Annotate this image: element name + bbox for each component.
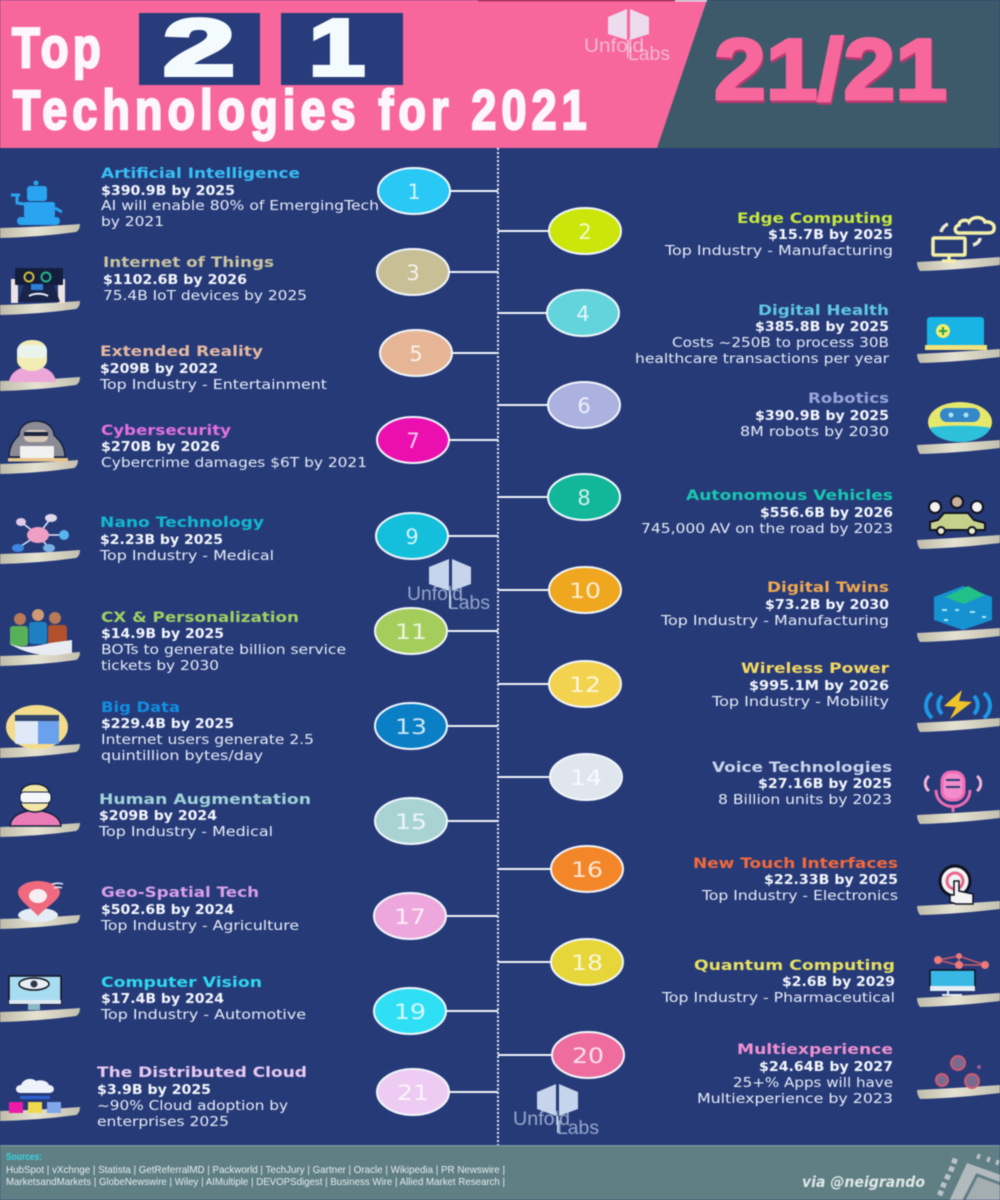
pedestal (0, 460, 78, 474)
badge 7 (377, 417, 449, 463)
description: 8M robots by 2030 (740, 425, 889, 440)
badge 9 (376, 513, 448, 559)
number box 2 (139, 3, 260, 92)
pedestal (0, 550, 80, 564)
pedestal (917, 1085, 1000, 1099)
description: by 2021 (101, 215, 164, 230)
title word Top: Top (12, 15, 101, 79)
connector (498, 868, 551, 870)
badge 20: 20 (572, 1044, 604, 1068)
pedestal (0, 652, 80, 666)
badge 17: 17 (394, 905, 426, 929)
badge 12: 12 (569, 673, 601, 697)
connector (447, 820, 498, 822)
heading: The Distributed Cloud (97, 1065, 307, 1081)
icon: person in XR visor (9, 340, 56, 382)
connector (498, 683, 549, 685)
heading: Multiexperience (737, 1042, 893, 1058)
badge 1: 1 (407, 180, 421, 204)
logo: Unfold Labs header: Labs (628, 44, 670, 65)
heading: Computer Vision (101, 975, 262, 991)
pedestal (917, 440, 1000, 454)
item 11: CX & Personalization (0, 608, 498, 674)
heading: Edge Computing (737, 211, 893, 227)
heading: Nano Technology (100, 515, 265, 531)
item 6: Robotics (498, 382, 1000, 454)
icon: quantum computer (930, 953, 989, 995)
sources list: HubSpot | vXchnge | Statista | GetReferralMD | Packworld | TechJury | Gartner | Oracle | Wikipedia | PR Newswire | (6, 1164, 505, 1176)
value: $390.9B by 2025 (755, 409, 889, 424)
heading: Robotics (808, 391, 889, 407)
heading: Big Data (101, 700, 180, 716)
item 12: Wireless Power (498, 661, 1000, 732)
value: $209B by 2022 (100, 362, 218, 377)
progress label 21/21: 21/21 (714, 22, 947, 118)
connector (450, 190, 498, 192)
heading: Autonomous Vehicles (686, 488, 893, 504)
icon: hacker at laptop (8, 421, 68, 462)
item 19: Computer Vision (0, 975, 498, 1034)
title line Technologies for 2021: Technologies for 2021 (13, 78, 587, 141)
item 15: Human Augmentation (0, 784, 498, 844)
value: $270B by 2026 (101, 440, 220, 455)
badge 5 (380, 330, 452, 376)
connector (446, 1010, 498, 1012)
pedestal (0, 744, 80, 758)
watermark logo: bottom (513, 1084, 599, 1139)
connector (447, 630, 498, 632)
footer band (0, 1145, 1000, 1200)
pedestal (917, 628, 1000, 642)
pedestal (0, 377, 80, 391)
connector (449, 1091, 498, 1093)
badge 21: 21 (397, 1081, 429, 1105)
watermark logo: center: Labs (448, 593, 490, 614)
top edge strip (478, 0, 707, 2)
description: Top Industry - Electronics (701, 889, 898, 904)
icon: data window (6, 705, 68, 749)
description (101, 199, 379, 230)
item 2: Edge Computing (498, 208, 1000, 271)
description: 8 Billion units by 2023 (718, 793, 892, 808)
description: healthcare transactions per year (635, 352, 890, 367)
icon: cloud with nodes (9, 1079, 61, 1113)
badge 4: 4 (576, 302, 590, 326)
description: 75.4B IoT devices by 2025 (103, 289, 307, 304)
connector (498, 589, 549, 591)
item 8: Autonomous Vehicles (498, 474, 1000, 549)
value: $995.1M by 2026 (749, 679, 889, 694)
value: $1102.6B by 2026 (103, 273, 247, 288)
item 7: Cybersecurity (0, 417, 498, 474)
description (101, 643, 346, 674)
heading: CX & Personalization (101, 610, 299, 626)
value: $390.9B by 2025 (101, 184, 235, 199)
item 4: Digital Health (498, 290, 1000, 367)
badge 2 (549, 208, 621, 254)
badge 4 (547, 290, 619, 336)
badge 17 (374, 893, 446, 939)
pedestal (0, 915, 80, 929)
badge 8: 8 (577, 486, 591, 510)
pedestal (917, 810, 1000, 824)
badge 13 (375, 703, 447, 749)
description: BOTs to generate billion service (101, 643, 346, 658)
icon: three customers (8, 609, 72, 655)
connector (449, 439, 498, 441)
connector (452, 352, 498, 354)
badge 1 (378, 168, 450, 214)
pedestal (0, 1107, 80, 1121)
pedestal (917, 349, 1000, 363)
pedestal (917, 993, 1000, 1007)
badge 2: 2 (578, 220, 592, 244)
icon: chip (938, 1156, 1000, 1200)
connector (446, 915, 498, 917)
badge 6: 6 (577, 394, 591, 418)
heading: Voice Technologies (712, 760, 892, 776)
item 9: Nano Technology (0, 513, 498, 564)
badge 12 (549, 661, 621, 707)
description: 745,000 AV on the road by 2023 (641, 522, 893, 537)
progress label 21/21: 21/21 (715, 24, 948, 120)
connector (448, 535, 498, 537)
heading: Wireless Power (741, 661, 890, 677)
badge 7: 7 (406, 429, 420, 453)
description: ~90% Cloud adoption by (97, 1099, 288, 1114)
connector (498, 961, 551, 963)
description: Multiexperience by 2023 (697, 1092, 893, 1107)
description: Cybercrime damages $6T by 2021 (101, 456, 367, 471)
heading: Digital Twins (767, 580, 889, 596)
number box 1: 1 (309, 3, 365, 92)
description: Top Industry - Automotive (100, 1008, 306, 1023)
item 16: New Touch Interfaces (498, 846, 1000, 915)
badge 3 (377, 249, 449, 295)
description: quintillion bytes/day (101, 749, 263, 764)
value: $502.6B by 2024 (101, 903, 234, 918)
icon: augmented person (10, 784, 61, 826)
badge 14: 14 (570, 766, 602, 790)
pedestal (0, 1008, 80, 1022)
item 13: Big Data (0, 700, 498, 764)
heading: Artificial Intelligence (101, 166, 300, 182)
item 21: The Distributed Cloud (0, 1065, 498, 1130)
timeline dotted spine (497, 148, 499, 1145)
item 5: Extended Reality (0, 330, 498, 393)
badge 3: 3 (406, 261, 420, 285)
badge 9: 9 (405, 525, 419, 549)
badge 18: 18 (571, 951, 603, 975)
description: Top Industry - Pharmaceutical (661, 991, 895, 1006)
watermark logo: bottom: Labs (557, 1118, 599, 1139)
badge 11 (375, 608, 447, 654)
value: $27.16B by 2025 (758, 777, 892, 792)
heading: Cybersecurity (101, 423, 232, 439)
icon: location pin (18, 881, 63, 922)
value: $385.8B by 2025 (755, 320, 889, 335)
heading: Internet of Things (103, 255, 274, 271)
connector (498, 1054, 552, 1056)
connector (498, 404, 548, 406)
heading: Geo-Spatial Tech (101, 885, 259, 901)
icon: microphone (925, 772, 981, 812)
badge 18 (551, 939, 623, 985)
icon: cloud and monitor (933, 218, 994, 261)
value: $556.6B by 2026 (760, 506, 893, 521)
description (635, 336, 890, 367)
item 17: Geo-Spatial Tech (0, 881, 498, 939)
heading: Extended Reality (100, 344, 264, 360)
connector (498, 230, 549, 232)
value: $22.33B by 2025 (764, 873, 898, 888)
header banner (0, 0, 1000, 148)
pedestal (917, 901, 1000, 915)
description: enterprises 2025 (97, 1115, 229, 1130)
icon: connected car (929, 496, 985, 535)
item 20: Multiexperience (498, 1032, 1000, 1107)
description: Top Industry - Manufacturing (660, 614, 889, 629)
watermark logo: center (407, 559, 490, 614)
heading: New Touch Interfaces (693, 856, 898, 872)
sources heading: Sources: (6, 1151, 42, 1163)
badge 6 (548, 382, 620, 428)
number box 2: 2 (163, 3, 235, 92)
badge 10 (549, 567, 621, 613)
credit: via @neigrando (802, 1173, 925, 1191)
number box 1 (281, 3, 403, 92)
sources list: MarketsandMarkets | GlobeNewswire | Wiley | AIMultiple | DEVOPSdigest | Business Wire | Allied Market Research | (6, 1176, 505, 1188)
value: $2.23B by 2025 (100, 533, 223, 548)
badge 20 (552, 1032, 624, 1078)
badge 13: 13 (395, 715, 427, 739)
badge 15: 15 (395, 810, 427, 834)
badge 16: 16 (571, 858, 603, 882)
badge 15 (375, 798, 447, 844)
heading: Human Augmentation (99, 792, 311, 808)
badge 11: 11 (395, 620, 427, 644)
value: $15.7B by 2025 (768, 228, 893, 243)
sources list (6, 1164, 505, 1188)
icon: wireless bolt (926, 690, 990, 719)
value: $2.6B by 2029 (782, 975, 895, 990)
description: AI will enable 80% of EmergingTech (101, 199, 379, 214)
badge 8 (548, 474, 620, 520)
icon: robot (11, 180, 62, 225)
badge 16 (551, 846, 623, 892)
description: Top Industry - Agriculture (100, 919, 299, 934)
heading: Quantum Computing (694, 958, 895, 974)
description (97, 1099, 288, 1130)
description (101, 733, 314, 764)
description: Top Industry - Manufacturing (664, 244, 893, 259)
connector (449, 271, 498, 273)
connector (498, 776, 550, 778)
value: $24.64B by 2027 (759, 1060, 893, 1075)
pedestal (917, 535, 1000, 549)
description: 25+% Apps will have (733, 1076, 893, 1091)
badge 19: 19 (394, 1000, 426, 1024)
connector (498, 496, 548, 498)
icon: robot head (928, 402, 992, 442)
pedestal (0, 301, 80, 315)
icon: IoT tablet and hands (11, 268, 65, 303)
value: $14.9B by 2025 (101, 627, 224, 642)
value: $17.4B by 2024 (101, 992, 224, 1007)
item 18: Quantum Computing (498, 939, 1000, 1007)
description: Internet users generate 2.5 (101, 733, 314, 748)
value: $209B by 2024 (99, 809, 217, 824)
badge 14 (550, 754, 622, 800)
icon: nano network (12, 514, 69, 552)
icon: touch target (940, 866, 973, 904)
value: $229.4B by 2025 (101, 717, 234, 732)
watermark logo: center: Unfold (407, 584, 463, 605)
description: Top Industry - Medical (98, 825, 273, 840)
heading: Digital Health (758, 303, 889, 319)
badge 19 (374, 988, 446, 1034)
header pink panel (0, 0, 707, 148)
badge 21 (377, 1069, 449, 1115)
item 3: Internet of Things (0, 249, 498, 315)
pedestal (0, 823, 80, 837)
value: $3.9B by 2025 (97, 1083, 211, 1098)
connector (498, 312, 547, 314)
watermark logo: bottom: Unfold (513, 1109, 570, 1130)
icon: health laptop (925, 317, 987, 350)
header slate panel (650, 0, 1000, 148)
icon: user groups (936, 1056, 981, 1088)
item 14: Voice Technologies (498, 754, 1000, 824)
description: Top Industry - Mobility (711, 695, 889, 710)
icon: digital twin cube (934, 586, 992, 630)
description (697, 1076, 893, 1107)
badge 5: 5 (409, 342, 423, 366)
logo: Unfold Labs header: Unfold (584, 36, 644, 57)
icon: vision monitor (9, 976, 61, 1010)
value: $73.2B by 2030 (765, 598, 889, 613)
pedestal (917, 718, 1000, 732)
description: Top Industry - Entertainment (99, 378, 327, 393)
item 1: Artificial Intelligence (0, 166, 498, 238)
connector (447, 725, 498, 727)
description: Top Industry - Medical (99, 549, 274, 564)
description: Costs ~250B to process 30B (672, 336, 889, 351)
pedestal (917, 257, 1000, 271)
pedestal (0, 224, 80, 238)
logo: Unfold Labs header (584, 9, 670, 65)
item 10: Digital Twins (498, 567, 1000, 642)
badge 10: 10 (569, 579, 601, 603)
description: tickets by 2030 (101, 659, 219, 674)
